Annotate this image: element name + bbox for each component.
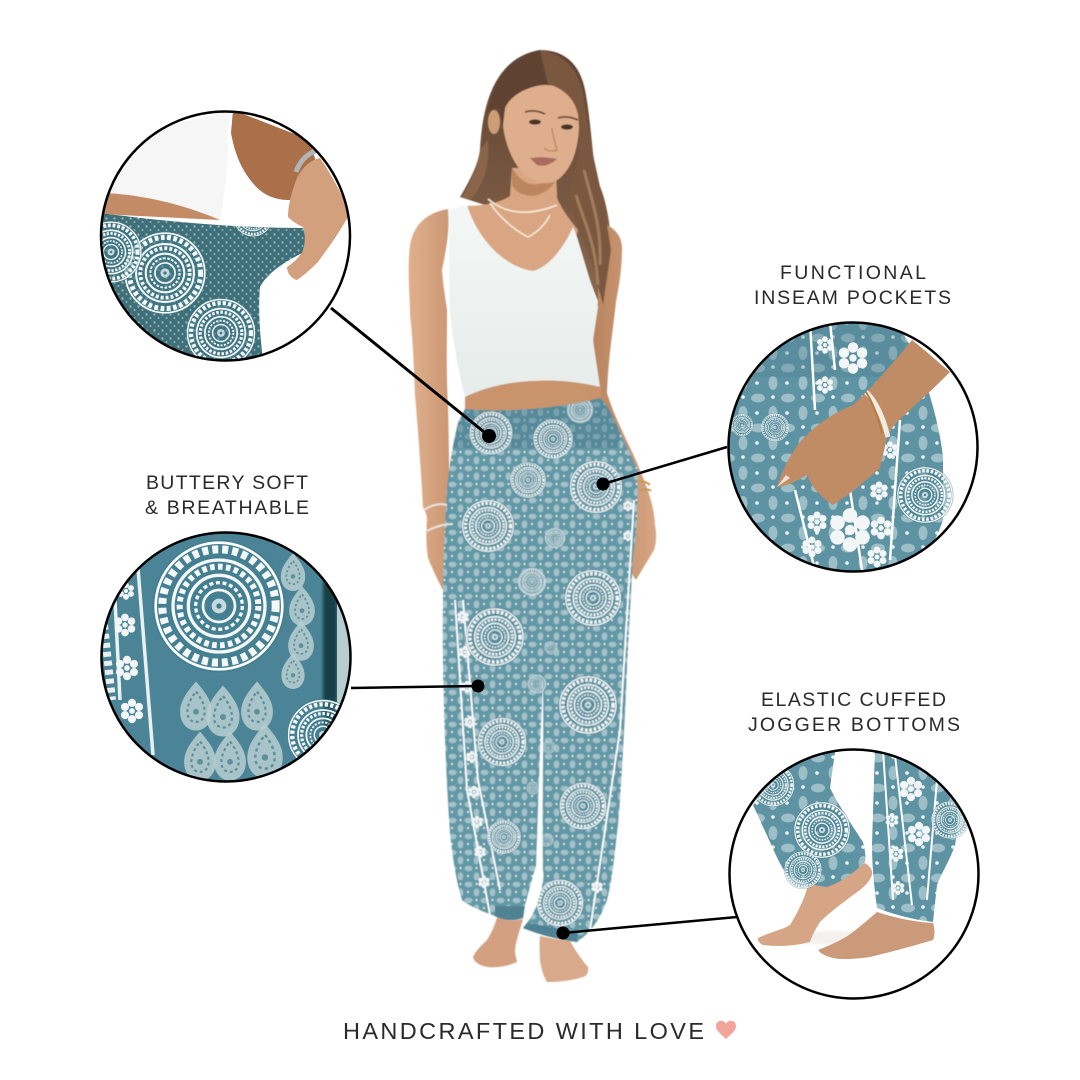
- bracelet: [296, 150, 318, 172]
- neck shadow: [512, 168, 556, 196]
- back pant leg: [753, 752, 865, 887]
- tagline: HANDCRAFTED WITH LOVE: [343, 1018, 704, 1044]
- label: buttery soft and breathable: BUTTERY SOFT: [146, 472, 308, 494]
- back foot: [758, 863, 872, 946]
- large mandala: [152, 539, 286, 673]
- circle: elastic cuffs: [725, 745, 983, 1003]
- model figure: [409, 50, 656, 982]
- gathered fabric: [95, 213, 305, 366]
- dark fold: [323, 582, 337, 727]
- cuffs: [495, 906, 578, 946]
- eyes: [525, 111, 578, 130]
- label: functional inseam pockets: [754, 262, 951, 309]
- label: elastic cuffed jogger bottoms: [748, 689, 960, 736]
- midriff: [465, 380, 601, 412]
- side stripes: [115, 568, 153, 755]
- necklaces: [488, 199, 557, 237]
- front pant leg: [872, 748, 957, 922]
- label: functional inseam pockets: INSEAM POCKETS: [754, 287, 951, 309]
- callout line: fabric: [351, 680, 484, 692]
- label: elastic cuffed jogger bottoms: JOGGER BOTTOMS: [748, 714, 960, 736]
- right arm: [593, 222, 656, 580]
- circle: inseam pocket: [725, 320, 981, 580]
- white crop top: [448, 205, 600, 397]
- left foot: [473, 917, 523, 967]
- fingernail: [777, 475, 790, 487]
- pants: [725, 320, 943, 580]
- left arm: [409, 209, 463, 614]
- upper arm: [231, 110, 318, 200]
- infographic: [100, 49, 980, 1039]
- label: buttery soft and breathable: [145, 472, 309, 519]
- icon: heart: [716, 1021, 736, 1039]
- label: elastic cuffed jogger bottoms: ELASTIC CUFFED: [761, 689, 946, 711]
- callout line: waistband: [331, 308, 496, 443]
- callout line: cuffs: [556, 917, 737, 940]
- flower motifs: [802, 336, 898, 568]
- bracelets left: [424, 504, 452, 531]
- paisleys and mandala: [731, 413, 954, 524]
- label: functional inseam pockets: FUNCTIONAL: [780, 262, 926, 284]
- nose: [544, 128, 557, 151]
- bracelets: [866, 392, 888, 437]
- bracelet right: [636, 481, 651, 491]
- forearm and hand in pocket: [777, 340, 950, 505]
- midriff skin: [100, 193, 220, 220]
- callout line: pockets: [596, 447, 727, 490]
- shadow: [808, 931, 854, 945]
- hair back: [460, 50, 612, 313]
- ear: [488, 110, 500, 134]
- hair front strands: [488, 50, 548, 125]
- paisley fabric: [180, 553, 315, 781]
- mouth: [530, 157, 557, 166]
- side ribbon: [455, 500, 634, 930]
- pale strip: [337, 604, 350, 710]
- front foot: [818, 912, 934, 959]
- face: [503, 85, 579, 183]
- second mandala: [288, 698, 340, 758]
- neck and chest: [462, 168, 578, 280]
- hand: [287, 158, 350, 280]
- white top: [107, 110, 233, 220]
- pants: [442, 398, 638, 943]
- right foot: [540, 936, 588, 982]
- circle: fabric close-up: [98, 530, 359, 786]
- label: buttery soft and breathable: & BREATHABLE: [145, 497, 309, 519]
- circle: stretchy waistband: [100, 110, 352, 362]
- mandalas: [461, 397, 623, 927]
